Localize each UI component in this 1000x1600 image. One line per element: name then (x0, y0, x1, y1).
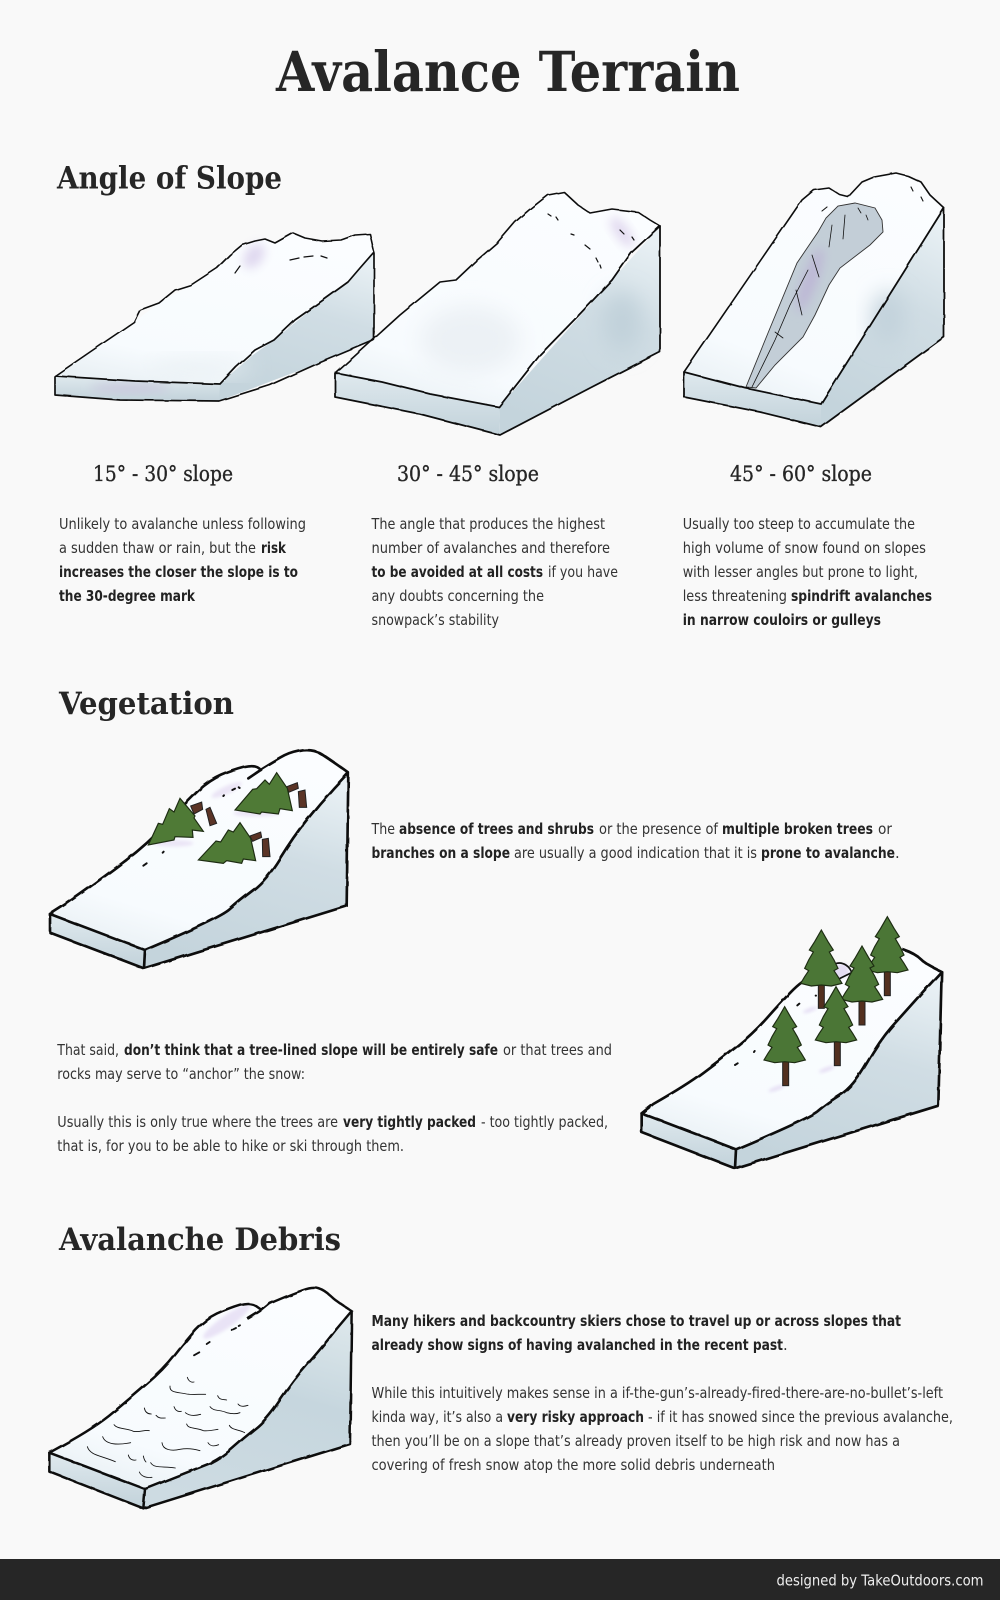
illustration: slope with standing trees (641, 917, 942, 1168)
text: 30-45 description: The angle that produces the highest (371, 516, 605, 533)
text: tree-lined slope warning: That said, (56, 1042, 119, 1059)
sublabel: 15-30 slope: 15° - 30° slope (93, 462, 233, 486)
text: absence of trees: branches on a slope (372, 845, 510, 862)
text: risky approach: then you’ll be on a slope that’s already proven itself to be high risk and now has a (372, 1433, 900, 1450)
text: 45-60 description: less threatening (683, 588, 787, 605)
sublabel: 30-45 slope: 30° - 45° slope (397, 462, 539, 486)
heading: angle of slope: Angle of Slope (56, 160, 282, 196)
text: tree-lined slope warning: very tightly packed (343, 1114, 476, 1131)
text: 15-30 description: Unlikely to avalanche unless following (59, 516, 306, 533)
text: absence of trees: multiple broken trees (722, 821, 873, 838)
fallen tree right (235, 773, 307, 814)
text: absence of trees: prone to avalanche (761, 845, 895, 862)
text: absence of trees: or the presence of (599, 821, 719, 838)
text: tree-lined slope warning: rocks may serve to “anchor” the snow: (57, 1066, 305, 1083)
tree front left (764, 1007, 805, 1086)
text: 45-60 description: high volume of snow found on slopes (683, 540, 926, 557)
text: tree-lined slope warning: that is, for you to be able to hike or ski through them. (57, 1138, 404, 1155)
illustration: slope with broken trees (49, 750, 348, 968)
text: risky approach: kinda way, it’s also a (372, 1409, 503, 1426)
fallen tree centre (198, 823, 270, 863)
illustration: 15-30 degree slope (55, 233, 374, 401)
text: absence of trees: The (371, 821, 395, 838)
text: absence of trees: are usually a good indication that it is (514, 845, 757, 862)
text: tree-lined slope warning: don’t think that a tree-lined slope will be entirely safe (124, 1042, 498, 1059)
text: 45-60 description: spindrift avalanches (791, 588, 932, 605)
illustration: 45-60 degree slope with chute (684, 173, 944, 427)
text: 15-30 description: the 30-degree mark (59, 588, 196, 605)
text: 30-45 description: snowpack’s stability (372, 612, 499, 629)
text: 45-60 description: in narrow couloirs or gulleys (683, 612, 881, 629)
text: 15-30 description: increases the closer the slope is to (59, 564, 298, 581)
sublabel: 45-60 slope: 45° - 60° slope (730, 462, 872, 486)
avalanche chute (746, 203, 883, 388)
tree back left (801, 930, 842, 1008)
text: hikers and skiers: already show signs of having avalanched in the recent past (372, 1337, 783, 1354)
illustration: slope with debris (49, 1288, 352, 1508)
text: absence of trees: . (895, 845, 900, 862)
footer bar (0, 1559, 1000, 1600)
text: 45-60 description: Usually too steep to accumulate the (683, 516, 915, 533)
text: 15-30 description: a sudden thaw or rain, but the (59, 540, 256, 557)
tree back right (867, 917, 908, 996)
tree middle (841, 946, 883, 1025)
debris ripples (87, 1377, 248, 1477)
text: hikers and skiers: . (783, 1337, 788, 1354)
text: 30-45 description: any doubts concerning the (372, 588, 544, 605)
text: absence of trees: absence of trees and shrubs (399, 821, 594, 838)
text: hikers and skiers: Many hikers and backcountry skiers chose to travel up or across slopes that (372, 1313, 901, 1330)
text: tree-lined slope warning: - too tightly packed, (481, 1114, 608, 1131)
text: tree-lined slope warning: Usually this is only true where the trees are (57, 1114, 338, 1131)
text: risky approach: covering of fresh snow atop the more solid debris underneath (372, 1457, 775, 1474)
text: risky approach: - if it has snowed since the previous avalanche, (648, 1409, 953, 1426)
text: 30-45 description: number of avalanches and therefore (372, 540, 610, 557)
text: 15-30 description: risk (261, 540, 287, 557)
fallen tree left (148, 798, 217, 845)
illustration: 30-45 degree slope (335, 192, 660, 435)
tree front centre (815, 987, 857, 1066)
text: 30-45 description: to be avoided at all costs (372, 564, 543, 581)
text: 30-45 description: if you have (548, 564, 618, 581)
heading: vegetation: Vegetation (58, 686, 234, 722)
title: Avalance Terrain (275, 39, 740, 104)
text: risky approach: very risky approach (507, 1409, 644, 1426)
text: 45-60 description: with lesser angles but prone to light, (683, 564, 918, 581)
text: absence of trees: or (878, 821, 893, 838)
heading: avalanche debris: Avalanche Debris (58, 1222, 341, 1258)
text: tree-lined slope warning: or that trees and (503, 1042, 612, 1059)
